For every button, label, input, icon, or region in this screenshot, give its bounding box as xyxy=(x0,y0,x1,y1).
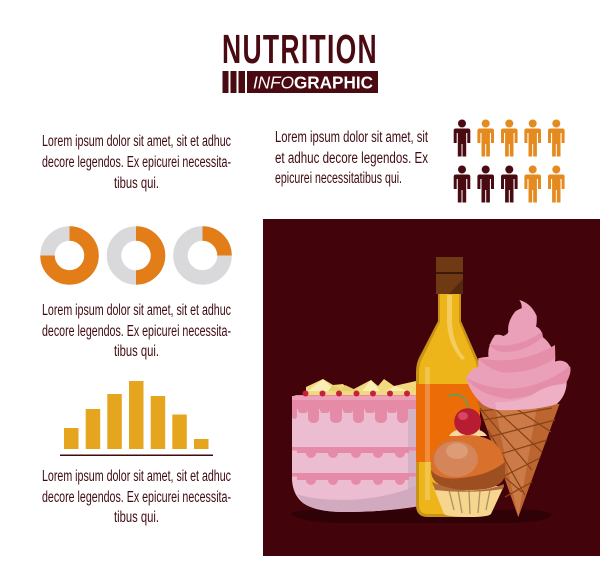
text block: top left: decore legendos. Ex epicurei necessita- xyxy=(42,154,231,171)
donut 75% xyxy=(48,234,92,278)
title stripes xyxy=(222,71,245,93)
bottle label xyxy=(416,384,480,462)
text block: top right: epicurei necessitatibus qui. xyxy=(275,170,402,187)
text block: top left: tibus qui. xyxy=(114,175,159,192)
cake topping xyxy=(306,379,416,395)
text block: top left xyxy=(42,133,231,192)
ice cream cone xyxy=(466,300,571,517)
text block: top right: et adhuc decore legendos. Ex xyxy=(275,150,428,167)
cupcake cream xyxy=(449,429,487,436)
text block: bottom left xyxy=(42,468,231,526)
cone waffle lines xyxy=(479,406,555,497)
text block: middle left: tibus qui. xyxy=(114,343,159,360)
donut charts xyxy=(48,234,224,278)
text block: middle left: decore legendos. Ex epicurei necessita- xyxy=(42,323,231,340)
bottle cap xyxy=(436,257,463,294)
subtitle banner: INFOGRAPHIC xyxy=(253,72,373,92)
ice cream swirl xyxy=(466,300,570,410)
bottle highlights xyxy=(425,367,430,500)
cupcake xyxy=(431,395,505,517)
cake body xyxy=(292,395,420,512)
text block: top right: Lorem ipsum dolor sit amet, sit xyxy=(275,129,429,146)
cake cherries xyxy=(302,390,410,396)
title xyxy=(222,26,378,93)
ground shadow xyxy=(291,510,552,523)
donut 25% xyxy=(180,234,224,278)
bottle glass xyxy=(416,294,480,517)
heading: nutrition: NUTRITION xyxy=(222,26,378,72)
cake cream layers xyxy=(292,447,417,485)
cake bottom shade xyxy=(297,485,418,512)
text block: bottom left: decore legendos. Ex epicurei necessita- xyxy=(42,489,231,506)
text block: bottom left: tibus qui. xyxy=(114,509,159,526)
text block: middle left: Lorem ipsum dolor sit amet, sit et adhuc xyxy=(42,302,231,319)
text block: top left: Lorem ipsum dolor sit amet, sit et adhuc xyxy=(42,133,231,150)
cupcake dome xyxy=(431,435,505,490)
text block: top right xyxy=(275,129,429,187)
cone xyxy=(477,401,560,517)
cake xyxy=(292,379,420,512)
cupcake wrapper xyxy=(433,486,504,517)
cherry xyxy=(448,395,481,435)
pictogram people chart xyxy=(454,120,565,202)
cake icing xyxy=(292,395,420,423)
bottle xyxy=(416,257,480,517)
donut 50% xyxy=(114,234,158,278)
bar chart xyxy=(60,381,213,456)
text block: middle left xyxy=(42,302,231,360)
panel: food illustration xyxy=(263,219,600,556)
text block: bottom left: Lorem ipsum dolor sit amet, sit et adhuc xyxy=(42,468,231,485)
